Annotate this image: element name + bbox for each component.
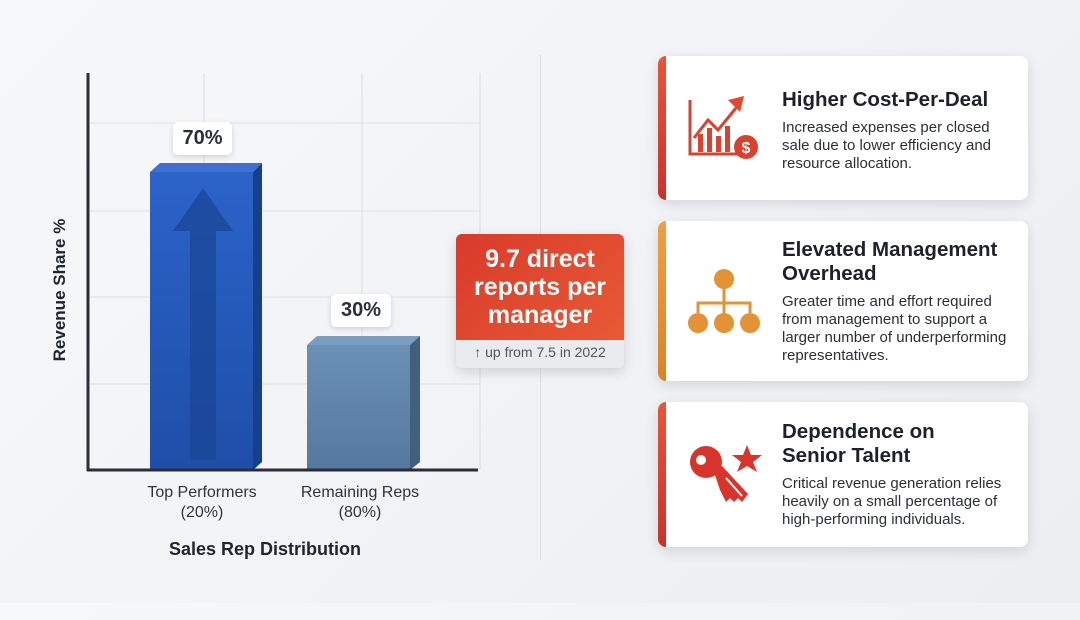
- card: cost per deal: [658, 56, 1028, 200]
- value label 70%: [173, 122, 232, 155]
- card: management overhead: [658, 221, 1028, 381]
- card: management overhead: Overhead: [782, 262, 877, 285]
- x labels: Top Performers: [147, 484, 257, 501]
- x labels: [147, 484, 257, 521]
- icon: org chart: [688, 269, 760, 333]
- card: senior talent: Senior Talent: [782, 444, 910, 467]
- callout: direct reports: 9.7 direct: [485, 245, 595, 273]
- value label 70%: 70%: [182, 127, 223, 149]
- bar: top performers: [150, 163, 262, 470]
- value label 30%: [331, 294, 391, 327]
- card: cost per deal: Increased expenses per closed sale due to lower efficiency and resource allocation.: [782, 119, 991, 172]
- icon: chart with dollar: $: [742, 140, 751, 157]
- x labels: (20%): [181, 504, 223, 521]
- value label 30%: 30%: [341, 299, 381, 321]
- card: senior talent: Dependence on: [782, 420, 935, 443]
- icon: chart with dollar: [688, 96, 758, 159]
- card: cost per deal: Higher Cost-Per-Deal: [782, 88, 988, 111]
- icon: key and star: [690, 445, 762, 502]
- chart: Remaining Reps: [301, 484, 419, 501]
- card: management overhead: Elevated Management: [782, 238, 997, 261]
- callout: direct reports: [456, 234, 624, 368]
- callout: direct reports: reports per: [474, 273, 606, 301]
- card: senior talent: Critical revenue generation relies heavily on a small percentage of high-performing individuals.: [782, 475, 1001, 528]
- x axis title: Sales Rep Distribution: [169, 539, 361, 559]
- card: senior talent: [658, 402, 1028, 547]
- y axis label: Revenue Share %: [50, 219, 69, 361]
- card: management overhead: Greater time and effort required from management to support a larger number of underperforming representatives.: [782, 293, 1006, 364]
- callout: direct reports: ↑ up from 7.5 in 2022: [474, 344, 606, 360]
- bar: remaining reps: [307, 336, 420, 470]
- chart: [50, 73, 480, 559]
- chart: (80%): [339, 504, 381, 521]
- callout: direct reports: manager: [488, 301, 592, 329]
